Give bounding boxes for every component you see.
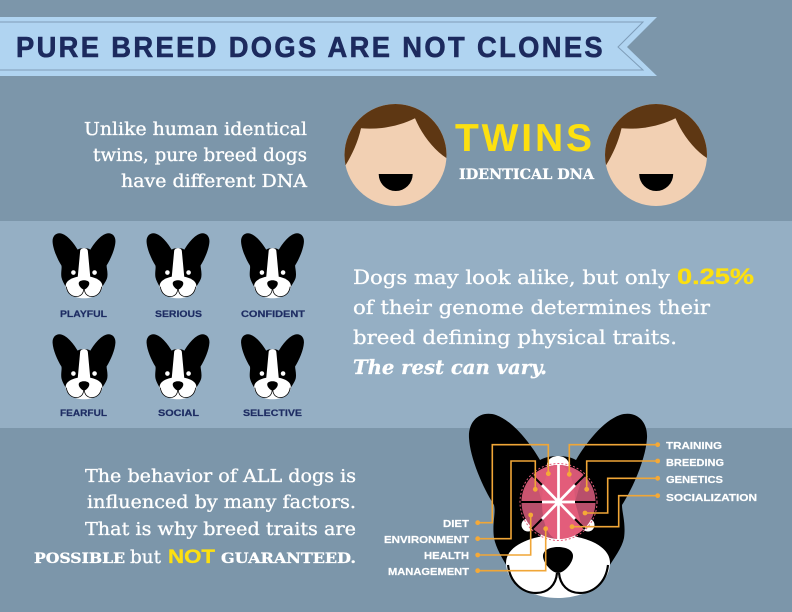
text: behavior: That is why breed traits are [85,520,356,540]
text: behavior: POSSIBLE [34,551,125,567]
factor labels: MANAGEMENT [388,567,469,578]
heading: twins: TWINS [455,117,592,160]
dog: playful [53,233,115,320]
dog: playful: PLAYFUL [60,309,107,320]
icon: right twin face [605,104,707,206]
text: genome [353,264,754,379]
connector: management [475,526,548,573]
factor labels: GENETICS [666,475,723,486]
text: behavior: influenced by many factors. [87,493,356,513]
connector: training [567,442,660,477]
factor labels: SOCIALIZATION [666,493,757,504]
factor labels: DIET [443,519,469,530]
text: genome: of their genome determines their [353,295,710,319]
emphasis: not: NOT [168,547,215,568]
dog: serious: SERIOUS [155,309,202,320]
icon: left twin face [344,104,446,206]
stat: 0.25%: 0.25% [677,264,754,289]
title banner [0,17,657,76]
connector: breeding [584,459,660,492]
text: unlike human twins: Unlike human identical [84,120,307,140]
illustration: dog with brain [469,414,660,598]
text: genome: Dogs may look alike, but only [353,265,671,289]
factor labels: ENVIRONMENT [384,535,469,546]
connector: socialization [570,493,660,529]
dog: confident [241,233,305,320]
connector: genetics [583,476,660,515]
text: behavior: but [130,548,161,568]
text: behavior [34,467,356,568]
dog: social [147,334,209,419]
text: genome: breed defining physical traits. [353,325,677,349]
bottom section background [0,428,792,612]
factor labels [384,441,757,578]
dog: selective [241,334,304,419]
text: behavior: GUARANTEED. [221,551,356,567]
dog: serious [147,233,209,320]
top section background [0,0,792,221]
factor labels: BREEDING [666,458,724,469]
dog: selective: SELECTIVE [243,408,302,419]
factor labels: TRAINING [666,441,722,452]
label: identical dna: IDENTICAL DNA [459,167,595,183]
text: genome: The rest can vary. [353,355,547,379]
text: behavior: The behavior of ALL dogs is [85,467,356,487]
dog: fearful: FEARFUL [60,408,107,419]
text: unlike human twins: twins, pure breed dogs [93,146,307,166]
text: unlike human twins: have different DNA [121,172,307,192]
dog: social: SOCIAL [158,408,199,419]
connector: environment [475,461,538,541]
middle section background [0,221,792,428]
title: PURE BREED DOGS ARE NOT CLONES [16,32,605,64]
dog: fearful [53,334,115,419]
connector: health [475,513,533,557]
brain [520,464,597,540]
connector: diet [475,445,551,525]
factor labels: HEALTH [424,551,469,562]
text: unlike human twins [84,120,307,192]
dog: confident: CONFIDENT [241,309,305,320]
